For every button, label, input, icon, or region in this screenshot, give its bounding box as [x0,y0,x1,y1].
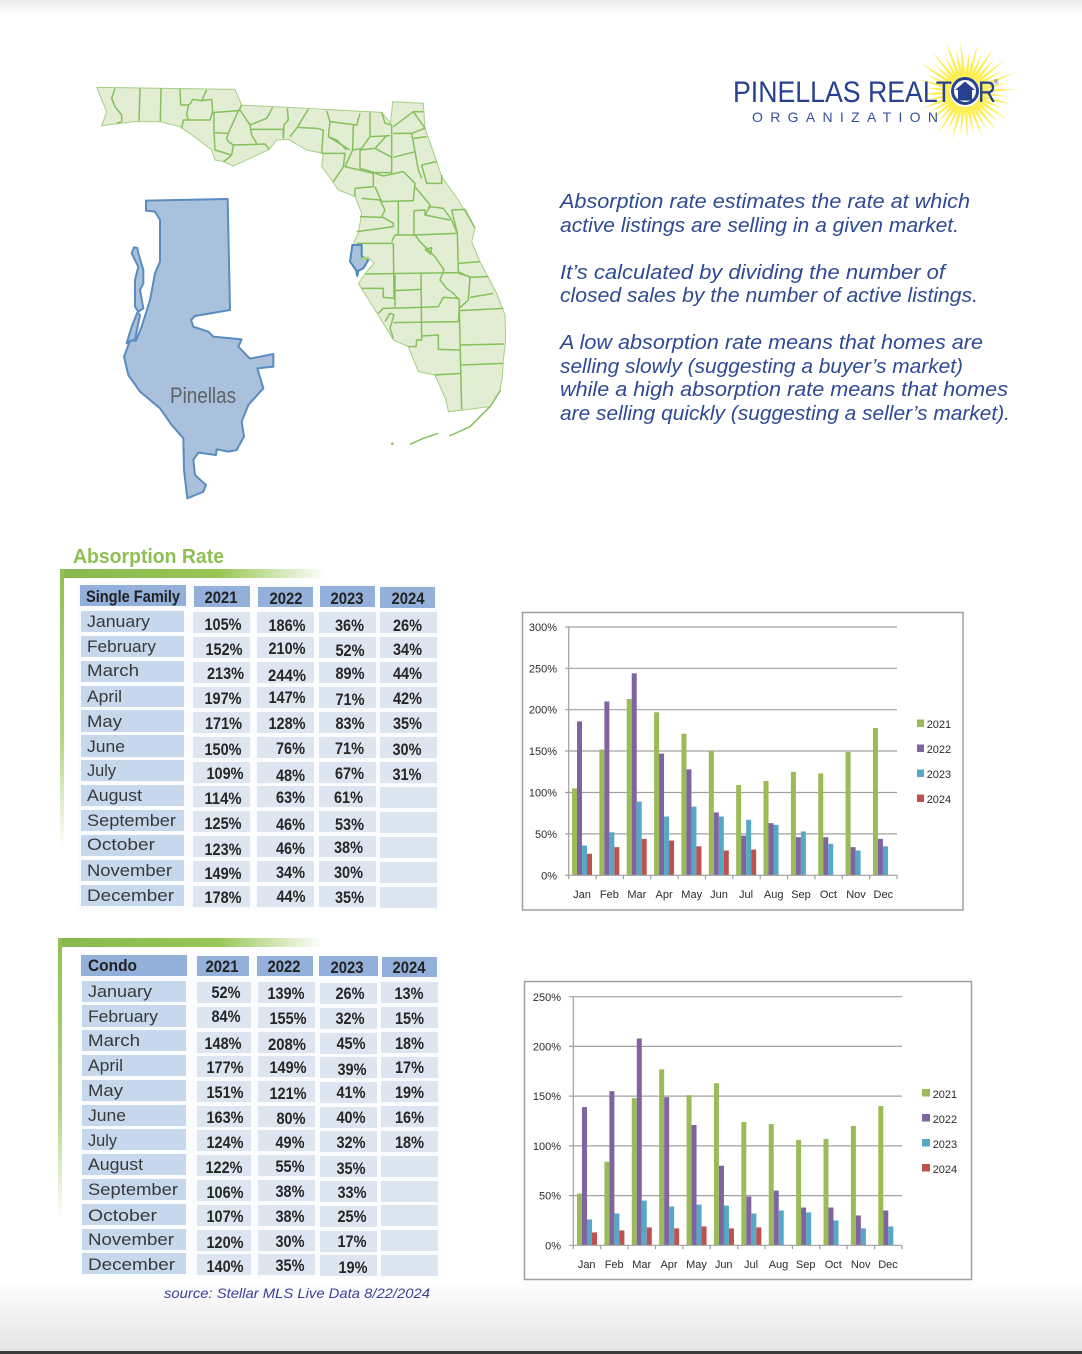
map: Pinellas location marker [350,245,368,276]
row: May: 19% [395,1084,424,1102]
row: October: 25% [338,1208,367,1226]
y axis labels: 200% [529,705,557,717]
x axis labels: Jul [744,1259,758,1271]
row: July [81,760,437,785]
table frame: condo green corner [58,938,323,1220]
row: December: 35% [276,1257,305,1275]
row: August: 63% [276,789,305,807]
row: January: 13% [394,985,424,1003]
y axis labels: 150% [533,1091,561,1103]
row: June: 76% [276,740,305,758]
y axis labels: 50% [539,1191,561,1203]
registered mark: ® [994,79,999,86]
row: November: 17% [338,1233,367,1251]
row: February: 32% [336,1010,365,1028]
row: December: 19% [338,1259,368,1277]
row: November [82,1229,438,1252]
row: October: October [88,1206,157,1225]
row: August: 35% [336,1160,366,1178]
row: April: 177% [206,1059,244,1077]
row: January [82,981,438,1004]
bar chart: condo [524,982,972,1280]
row: August: August [88,1155,143,1174]
y axis labels [529,622,557,882]
map label: Pinellas: Pinellas [170,383,236,408]
row: May: 151% [206,1084,244,1102]
row: February: February [87,637,157,656]
table frame: single family green corner [60,569,325,849]
row: October: October [87,835,155,854]
legend: 2022 [933,1114,957,1126]
y axis labels: 150% [529,746,557,758]
header row: single family: 2023 [330,590,364,608]
x axis labels: Dec [878,1259,898,1271]
row: July: 67% [335,765,364,783]
row: November: November [87,861,172,880]
map: Florida counties with Pinellas highlighted [97,87,506,498]
row: July: July [88,1131,117,1150]
row: June: 71% [335,740,364,758]
x axis labels: Aug [764,889,783,901]
header row: condo [81,955,437,977]
row: April: 17% [395,1059,424,1077]
row: February: 155% [270,1010,307,1028]
row: May: 121% [270,1085,307,1103]
legend [917,719,951,806]
row: November: 30% [334,864,363,882]
header row: condo: 2023 [330,959,364,977]
row: March: 89% [336,665,365,683]
row: January: 186% [268,617,306,635]
header row: condo: 2024 [392,959,426,977]
row: July: 32% [336,1134,366,1152]
bar chart: single family [522,612,963,910]
legend: 2023 [927,769,951,781]
text block: absorption rate explanation: It’s calculated by dividing the number of [560,262,948,284]
y axis labels: 0% [541,870,557,882]
row: January: 36% [335,617,364,635]
x axis labels: Jan [573,889,591,901]
row: May: 128% [268,715,306,733]
row: March: 244% [268,667,306,685]
row: June: 30% [392,741,422,759]
header row: condo: 2021 [206,958,238,976]
row: December: December [87,886,174,905]
row: December: 140% [206,1258,244,1276]
row: June [82,1105,438,1128]
row: February: 15% [395,1010,424,1028]
row: March [82,1030,438,1054]
logo: Pinellas Realtor Organization [733,40,1017,141]
x axis labels: Feb [600,889,619,901]
row: December: 35% [335,889,364,907]
source note: source: Stellar MLS Live Data 8/22/2024 [164,1285,430,1301]
row: October [81,835,437,859]
legend: 2022 [927,744,951,756]
y axis labels: 250% [533,992,561,1004]
row: November: 34% [276,864,305,882]
x axis labels [573,889,894,901]
x axis labels: Sep [791,889,811,901]
y axis labels [533,992,561,1252]
row: May: 83% [336,715,365,733]
row: June: June [88,1106,126,1125]
table: condo [79,953,441,1278]
row: June: 80% [276,1110,306,1128]
row: May: May [88,1081,124,1100]
row: April [82,1055,438,1079]
y axis labels: 200% [533,1042,561,1054]
row: February [81,636,437,660]
row: June: 16% [395,1109,424,1127]
row: April: April [88,1056,123,1075]
text block: absorption rate explanation [559,191,1010,425]
row: September: 46% [276,816,305,834]
row: June: 163% [206,1109,244,1127]
text block: absorption rate explanation: are selling quickly (suggesting a seller’s market). [560,403,1010,425]
row: August: 55% [276,1158,305,1176]
icon: house inside ring [952,78,978,104]
row: July: 124% [206,1134,244,1152]
header row: single family [80,585,435,608]
row: July: July [87,761,116,780]
legend: 2024 [933,1164,957,1176]
row: January: 52% [212,984,241,1002]
row: August [82,1154,438,1178]
row: March: 208% [268,1036,306,1054]
y axis labels: 300% [529,622,557,634]
row: March: March [87,661,139,680]
legend: 2023 [933,1139,957,1151]
x axis labels: Mar [632,1259,652,1271]
row: December: 44% [276,888,306,906]
row: April: 39% [338,1061,367,1079]
row: April: April [87,687,122,706]
row: July: 49% [276,1134,305,1152]
row: July: 109% [206,765,244,783]
heading: Absorption Rate: Absorption Rate [73,546,224,568]
row: November: 149% [204,865,242,883]
row: May: 35% [393,715,422,733]
text block: absorption rate explanation: Absorption rate estimates the rate at which [559,191,970,213]
bars: condo [577,1038,893,1245]
row: December [81,885,437,908]
row: March: 18% [395,1035,424,1053]
row: May: 41% [336,1084,366,1102]
row: November: November [88,1230,174,1249]
row: September: September [87,811,176,830]
header row: single family: Single Family [86,588,181,606]
row: February: 52% [336,642,365,660]
row: April: 147% [268,689,306,707]
x axis labels: Jan [578,1259,596,1271]
row: July: 18% [395,1134,424,1152]
header row: condo: 2022 [268,958,300,976]
row: January: 105% [204,616,242,634]
row: August [81,785,437,808]
row: March: 45% [336,1035,366,1053]
row: June: June [87,737,125,756]
header row: single family: 2021 [204,589,238,607]
x axis labels: Nov [846,889,866,901]
x axis labels: Nov [851,1259,871,1271]
table: single family [78,583,440,910]
row: September: 53% [335,816,364,834]
x axis labels: Apr [656,889,673,901]
row: July: 31% [392,766,422,784]
logo wordmark: PINELLAS REALT [733,76,952,109]
row: July: 48% [276,767,305,785]
x axis labels: Feb [605,1259,624,1271]
legend [922,1089,957,1176]
row: April: 197% [204,690,242,708]
logo subtitle: ORGANIZATION [752,109,938,125]
text block: absorption rate explanation: active listings are selling in a given market. [560,215,959,237]
row: June [81,735,437,759]
x axis labels: Oct [820,889,837,901]
row: October: 38% [334,839,363,857]
header row: condo: Condo [88,957,137,975]
x axis labels: Jun [715,1259,733,1271]
row: June: 40% [336,1109,366,1127]
y axis labels: 0% [545,1240,561,1252]
map: Florida state [97,87,506,445]
legend: 2024 [927,794,951,806]
row: August: 61% [334,789,363,807]
row: August: 114% [204,790,242,808]
row: August: 122% [206,1159,243,1177]
legend: 2021 [933,1089,957,1101]
row: May [82,1080,438,1103]
x axis labels: Mar [627,889,647,901]
header row: single family: 2022 [270,590,302,608]
icon: yellow sun rays [916,40,1017,141]
row: September [81,810,437,834]
text block: absorption rate explanation: selling slowly (suggesting a buyer’s market) [560,356,963,378]
row: April: 42% [393,690,422,708]
row: December: December [88,1255,175,1274]
row: January: 26% [336,985,365,1003]
row: August: August [87,786,142,805]
x axis labels: Apr [660,1259,678,1271]
x axis labels: May [686,1259,707,1271]
text block: absorption rate explanation: closed sales by the number of active listings. [560,285,978,307]
legend: 2021 [927,719,951,731]
map: enlarged Pinellas County [124,199,273,498]
row: November [81,860,437,883]
row: July [82,1129,438,1152]
row: January: January [87,612,151,631]
row: March: 213% [207,665,244,683]
row: October: 107% [206,1208,244,1226]
row: February: 34% [393,641,422,659]
text block: absorption rate explanation: while a high absorption rate means that homes [560,379,1008,401]
x axis labels: Dec [874,889,894,901]
row: March [81,661,437,685]
row: March: 44% [393,665,422,683]
row: January: January [88,982,153,1001]
x axis labels [578,1259,898,1271]
x axis labels: Jun [710,889,728,901]
row: September: September [88,1180,178,1199]
row: September: 125% [204,815,242,833]
row: June: 150% [204,741,242,759]
y axis labels: 250% [529,663,557,675]
row: February: February [88,1007,159,1026]
row: April: 71% [336,691,365,709]
x axis labels: May [681,889,703,901]
row: February: 152% [206,641,243,659]
row: January: 26% [393,617,422,635]
row: January: 139% [268,985,305,1003]
row: September: 38% [276,1183,305,1201]
logo letter R: R [978,76,996,109]
row: December: 178% [204,889,242,907]
row: December [82,1253,438,1277]
x axis labels: Sep [796,1259,815,1271]
header row: single family: 2024 [392,590,425,608]
row: May: May [87,712,123,731]
y axis labels: 50% [535,829,557,841]
row: March: March [88,1031,140,1050]
text block: absorption rate explanation: A low absorption rate means that homes are [559,332,983,354]
x axis labels: Jul [739,889,753,901]
y axis labels: 100% [529,788,557,800]
row: February: 84% [212,1008,241,1026]
row: October [82,1204,438,1227]
row: October: 46% [276,840,305,858]
row: October: 38% [276,1208,305,1226]
row: November: 30% [276,1233,305,1251]
x axis labels: Oct [825,1259,842,1271]
row: March: 148% [204,1035,242,1053]
row: October: 123% [204,841,242,859]
row: May: 171% [205,715,242,733]
row: May [81,710,437,733]
row: November: 120% [206,1234,244,1252]
row: April: 149% [270,1059,307,1077]
row: September: 106% [206,1184,244,1202]
row: April [81,686,437,709]
row: September [82,1179,438,1202]
row: February [82,1005,438,1029]
x axis labels: Aug [769,1259,788,1271]
y axis labels: 100% [533,1141,561,1153]
row: September: 33% [338,1184,367,1202]
bars: single family [572,673,888,875]
row: January [81,611,437,635]
row: February: 210% [268,640,306,658]
